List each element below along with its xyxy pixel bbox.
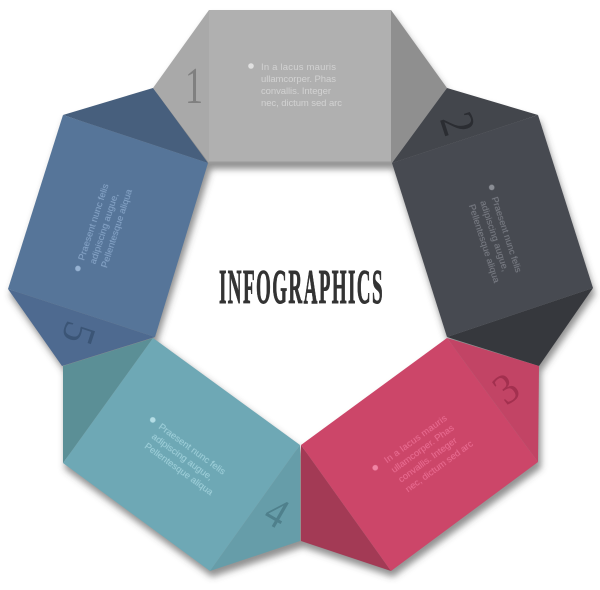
- panel 2: charcoal: [392, 88, 593, 366]
- number 4: 4: [257, 487, 297, 538]
- text block 3: ullamcorper. Phas: [389, 423, 457, 476]
- text block 2: adipiscing augue,: [477, 199, 511, 273]
- number 5: 5: [51, 316, 106, 351]
- text block 3: In a lacus mauris: [382, 413, 450, 466]
- title: INFOGRAPHICS: [219, 261, 384, 315]
- text block 3: convallis. Integer: [396, 435, 460, 485]
- text block 4: [133, 415, 230, 498]
- text block 2: Pellentesque aliqua: [466, 203, 502, 285]
- number 1: 1: [185, 56, 203, 115]
- text block 2: [462, 183, 525, 285]
- text block 1: [248, 62, 342, 109]
- number 3: 3: [484, 364, 529, 415]
- text block 2: Praesent nunc felis: [489, 196, 524, 274]
- text block 5: adipiscing augue,: [88, 192, 121, 266]
- text block 3: [370, 409, 476, 504]
- text block 1: nec, dictum sed arc: [261, 98, 342, 109]
- text block 4: Pellentesque aliqua: [142, 441, 216, 498]
- text block 1: In a lacus mauris: [261, 62, 336, 73]
- text block 5: [73, 180, 135, 281]
- text block 5: Pellentesque aliqua: [99, 187, 135, 269]
- panel 3: crimson: [301, 338, 539, 571]
- panel 5: blue: [8, 88, 208, 366]
- number 2: 2: [429, 106, 487, 142]
- panel 4: teal: [63, 338, 300, 571]
- text block 4: adipiscing augue,: [149, 431, 215, 483]
- text block 4: Praesent nunc felis: [156, 422, 228, 478]
- text block 5: Praesent nunc felis: [76, 182, 112, 262]
- panel 1: grey: [153, 10, 447, 164]
- text block 3: nec, dictum sed arc: [403, 438, 476, 495]
- text block 1: ullamcorper. Phas: [261, 74, 336, 85]
- text block 1: convallis. Integer: [261, 86, 331, 97]
